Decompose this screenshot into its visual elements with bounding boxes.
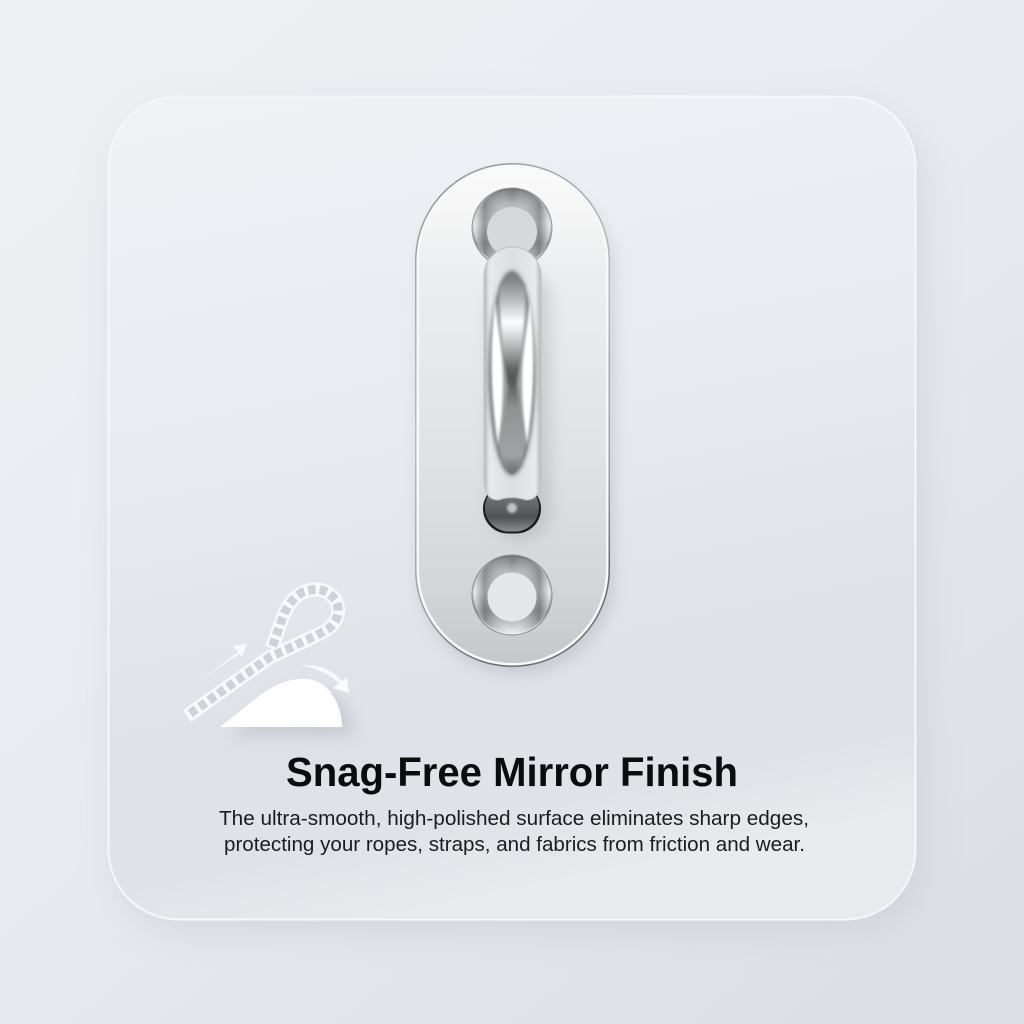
ring body <box>484 247 541 500</box>
arrow: up along rope <box>198 643 247 682</box>
bottom collar <box>483 484 541 534</box>
arrow: curved over dome <box>301 665 349 693</box>
top countersunk hole <box>472 188 552 268</box>
right crescent highlight <box>522 300 533 445</box>
panel: frosted card <box>108 96 922 930</box>
body text: protecting your ropes, straps, and fabrics from friction and wear. <box>224 834 805 856</box>
heading: Snag-Free Mirror Finish <box>286 749 738 795</box>
left crescent highlight <box>492 300 503 445</box>
body text <box>219 808 809 856</box>
plate shadow <box>420 176 614 674</box>
rope <box>187 589 338 716</box>
icon shadow <box>228 690 352 736</box>
lower reflection <box>500 380 525 473</box>
plate body <box>415 163 610 667</box>
ring inner reflection <box>489 271 535 475</box>
body text: The ultra-smooth, high-polished surface eliminates sharp edges, <box>219 808 809 830</box>
bottom countersunk hole <box>472 555 552 635</box>
ring shadow <box>490 270 550 540</box>
dome surface <box>220 679 342 727</box>
icon: rope sliding over smooth surface <box>187 589 352 736</box>
product: polished eye plate <box>415 163 614 674</box>
upper reflection <box>500 276 525 387</box>
